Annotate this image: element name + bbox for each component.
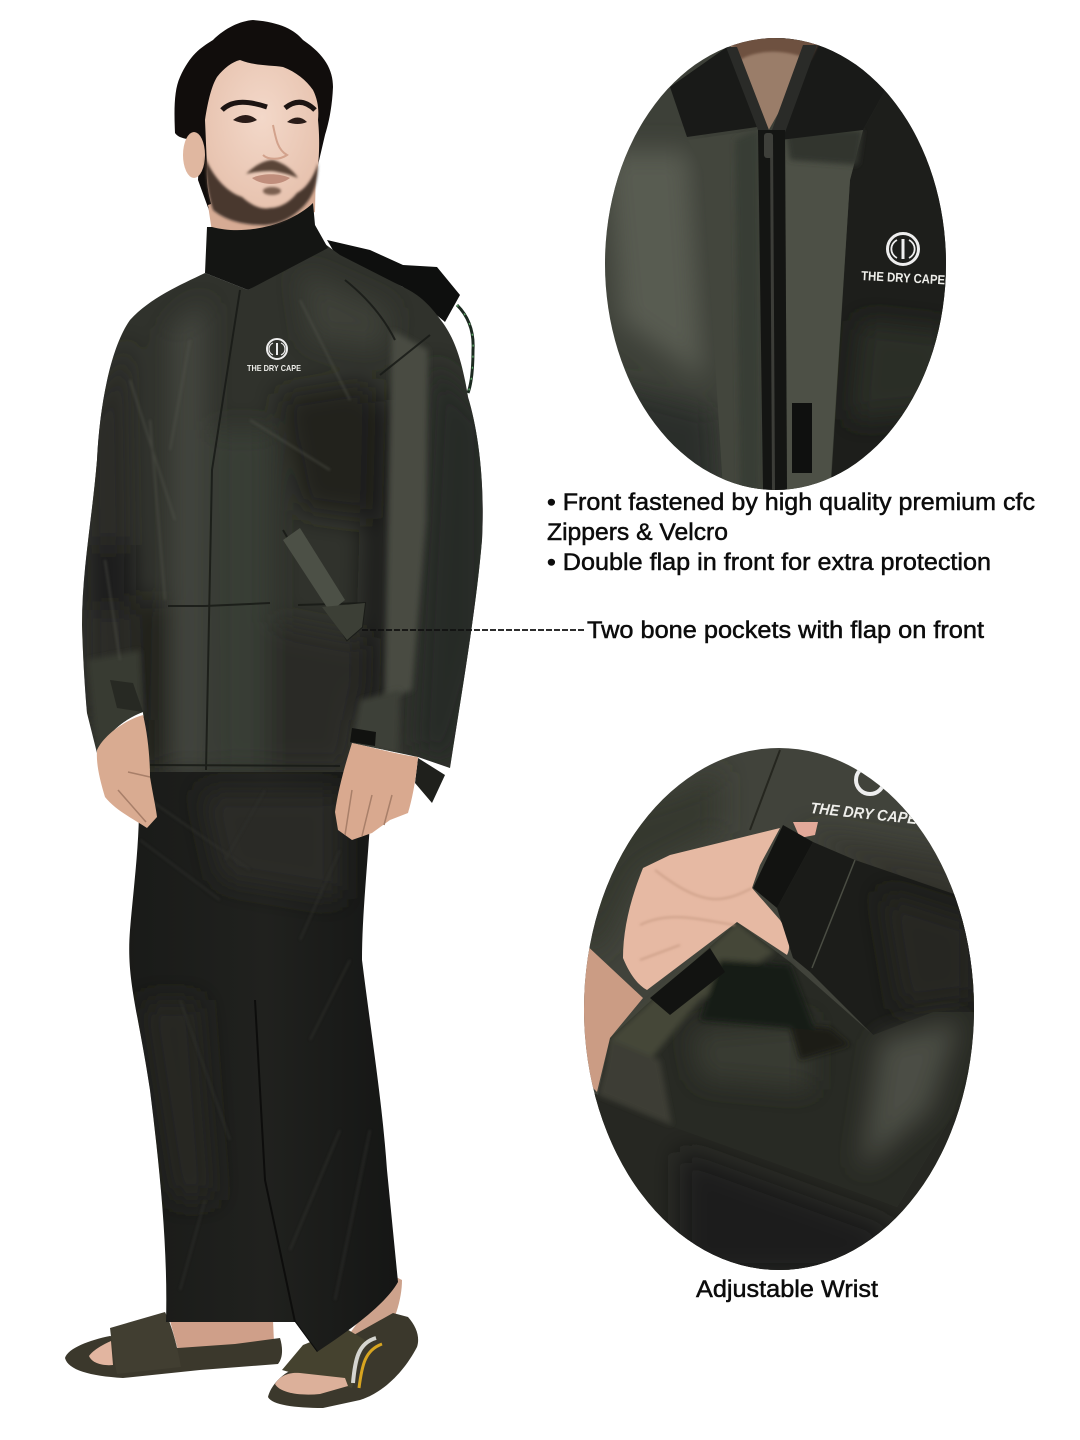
forearm	[583, 942, 643, 1092]
seam	[750, 750, 780, 830]
logo: the dry cape: THE DRY CAPE	[247, 363, 301, 373]
logo	[888, 234, 918, 264]
detail circle: front zipper: THE DRY CAPE	[861, 268, 946, 287]
sleeve interior	[810, 860, 975, 1035]
hair back	[175, 20, 333, 213]
left cuff strap	[110, 680, 143, 712]
standing collar	[205, 203, 328, 290]
left hand	[97, 715, 157, 828]
neck	[208, 165, 316, 234]
text: zipper and flap features: • Front fastened by high quality premium cfc	[547, 489, 1035, 516]
left yoke	[670, 47, 757, 137]
right sandal and foot	[268, 1275, 418, 1408]
right dark panel	[832, 90, 946, 478]
fingernail	[793, 822, 818, 838]
sleeve highlights	[690, 1020, 960, 1170]
velcro tab top	[753, 825, 813, 908]
mouth	[252, 174, 290, 184]
text: pockets callout: Two bone pockets with flap on front	[587, 617, 984, 644]
cuff velcro	[350, 728, 376, 746]
logo: the dry cape	[247, 339, 301, 373]
velcro strip	[792, 403, 812, 473]
zipper	[758, 130, 787, 490]
drawcord	[457, 305, 473, 393]
callout: pockets leader line	[362, 629, 586, 631]
neck skin	[730, 45, 800, 130]
right cuff strap	[415, 758, 445, 803]
logo	[856, 766, 884, 794]
right yoke	[785, 44, 885, 140]
hand	[623, 828, 789, 990]
detail circle: adjustable wrist: THE DRY CAPE	[810, 800, 918, 828]
figure: man wearing rain suit	[65, 20, 490, 1408]
caption: adjustable wrist: Adjustable Wrist	[696, 1276, 878, 1303]
zip tapes at neck	[726, 45, 817, 138]
eyebrows and eyes	[222, 102, 315, 124]
face	[205, 60, 319, 225]
ear	[183, 132, 205, 178]
detail circle: adjustable wrist	[580, 745, 980, 1275]
dark flap	[777, 842, 855, 972]
left sandal and foot	[65, 1310, 282, 1378]
beard	[205, 157, 318, 225]
text: zipper and flap features: Zippers & Velcro	[547, 519, 728, 546]
lower sleeve	[598, 922, 975, 1207]
hood bundle	[327, 240, 460, 322]
jacket seams	[150, 280, 430, 770]
right hand	[335, 743, 418, 840]
right placket	[785, 130, 863, 490]
text: zipper and flap features: • Double flap in front for extra protection	[547, 549, 991, 576]
detail circle: front zipper	[600, 30, 950, 500]
pocket flap highlight	[283, 528, 345, 612]
wrist circle shading	[580, 770, 975, 950]
chin tuft	[263, 187, 281, 195]
velcro tab lower	[650, 948, 725, 1015]
trouser folds	[140, 790, 370, 1300]
jacket	[70, 240, 490, 780]
beard edge	[765, 38, 814, 44]
jacket shading	[82, 270, 490, 772]
trousers	[129, 770, 398, 1352]
zipper circle shading	[600, 150, 720, 500]
lower body	[594, 1094, 962, 1270]
left placket	[718, 390, 760, 489]
nose	[263, 125, 287, 159]
text: zipper and flap features	[547, 489, 1035, 576]
moustache	[246, 160, 298, 178]
